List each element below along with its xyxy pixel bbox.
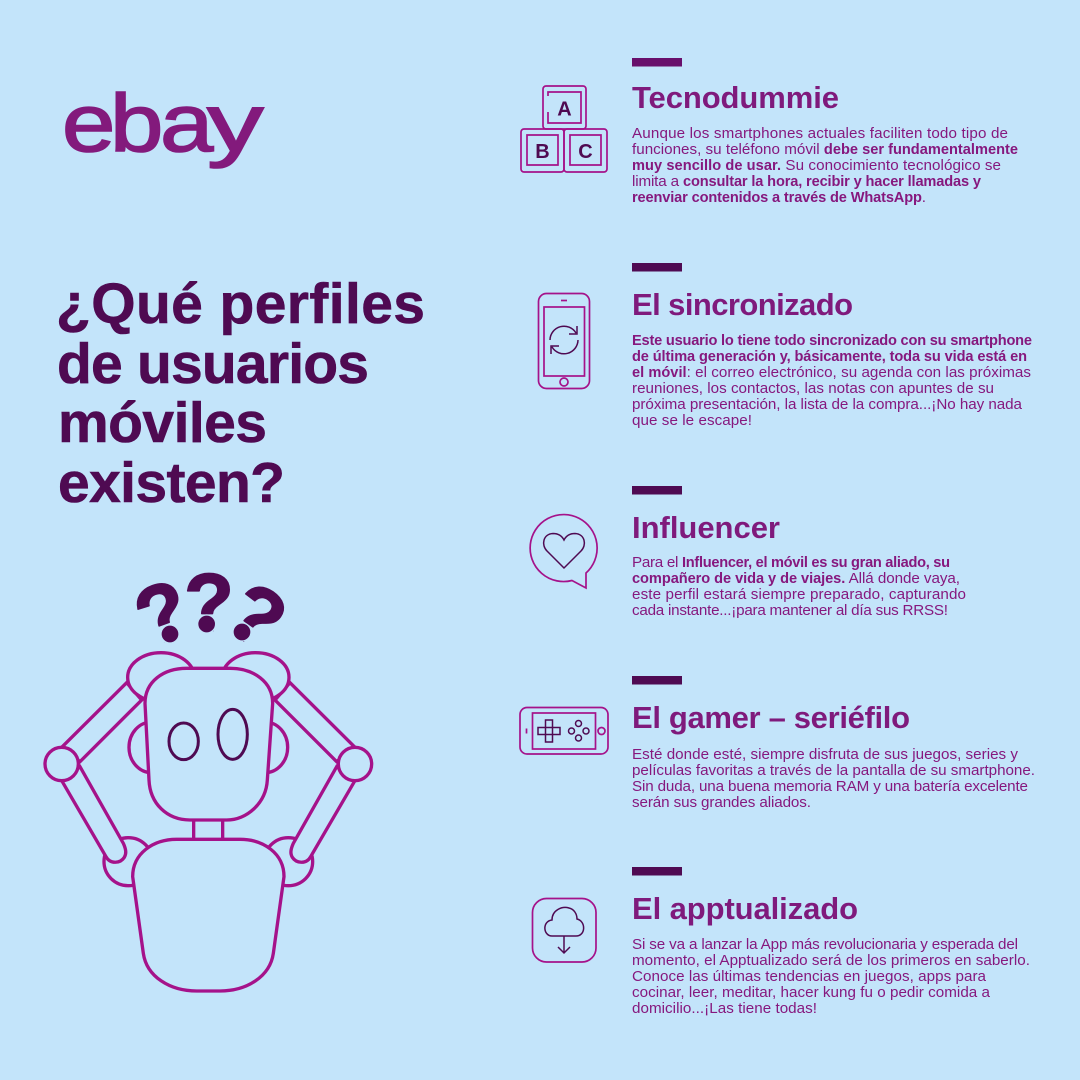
body text: funciones, su teléfono móvil debe ser fundamentalmente	[632, 141, 1018, 158]
title: de usuarios	[57, 332, 369, 396]
icon: ABC blocks: C	[578, 141, 593, 163]
body text: limita a consultar la hora, recibir y hacer llamadas y	[632, 173, 982, 190]
robot eyes	[169, 709, 247, 760]
accent bar	[632, 58, 682, 66]
heading: Tecnodummie	[632, 80, 839, 115]
title: ¿Qué perfiles	[56, 272, 425, 336]
body text: Para el Influencer, el móvil es su gran aliado, su	[632, 554, 950, 571]
accent bar	[632, 263, 682, 272]
body text: películas favoritas a través de la pantalla de su smartphone.	[632, 762, 1035, 779]
title: existen?	[58, 451, 285, 515]
body text: cada instante...¡para mantener al día sus RRSS!	[632, 602, 948, 619]
title	[56, 272, 425, 515]
body text: cocinar, leer, meditar, hacer kung fu o pedir comida a	[632, 984, 991, 1001]
body text: muy sencillo de usar. Su conocimiento tecnológico se	[632, 157, 1001, 174]
body text: reenviar contenidos a través de WhatsApp.	[632, 189, 926, 206]
logo: ebay	[62, 77, 264, 168]
body text	[632, 936, 1030, 1017]
illustration: confused robot	[45, 557, 372, 991]
body text: domicilio...¡Las tiene todas!	[632, 1000, 817, 1017]
body text: Esté donde esté, siempre disfruta de sus juegos, series y	[632, 746, 1018, 763]
body text: Conoce las últimas tendencias en juegos, apps para	[632, 968, 987, 985]
body text: Si se va a lanzar la App más revolucionaria y esperada del	[632, 936, 1018, 953]
body text: Sin duda, una buena memoria RAM y una batería excelente	[632, 778, 1028, 795]
robot arms and shoulders	[45, 653, 372, 886]
body text: que se le escape!	[632, 412, 752, 429]
icon: ABC blocks: B	[535, 141, 550, 163]
body text: momento, el Apptualizado será de los primeros en saberlo.	[632, 952, 1030, 969]
icon: phone with sync	[538, 294, 590, 388]
heading: Influencer	[632, 510, 780, 545]
panel: El sincronizado	[538, 263, 1032, 429]
heading: El gamer – seriéfilo	[632, 700, 910, 735]
panel: Influencer	[530, 486, 966, 619]
heading: El apptualizado	[632, 891, 858, 926]
body text: serán sus grandes aliados.	[632, 794, 811, 811]
body text: este perfil estará siempre preparado, capturando	[632, 586, 966, 603]
body text: el móvil: el correo electrónico, su agenda con las próximas	[632, 364, 1031, 381]
panel: El gamer – seriéfilo	[520, 676, 1035, 811]
accent bar	[632, 867, 682, 876]
icon: ABC blocks: A	[557, 98, 572, 120]
logo: ebay: y	[207, 77, 264, 168]
body text	[632, 125, 1018, 206]
question marks: ?	[123, 562, 201, 665]
icon: ABC blocks	[521, 86, 607, 172]
panel: El apptualizado	[532, 867, 1030, 1017]
body text: reuniones, los contactos, las notas con apuntes de su	[632, 380, 994, 397]
accent bar	[632, 486, 682, 494]
body text: próxima presentación, la lista de la compra...¡No hay nada	[632, 396, 1023, 413]
body text	[632, 333, 1032, 429]
logo: ebay: b	[110, 77, 163, 168]
logo: ebay: e	[62, 77, 115, 168]
question marks: ?	[184, 557, 234, 648]
heading: El sincronizado	[632, 287, 853, 322]
body text: compañero de vida y de viajes. Allá donde vaya,	[632, 570, 960, 587]
body text	[632, 746, 1035, 811]
title: móviles	[58, 391, 267, 455]
icon: speech bubble with heart	[530, 515, 597, 588]
question marks: ?	[210, 565, 303, 668]
body text: Este usuario lo tiene todo sincronizado con su smartphone	[632, 333, 1032, 349]
robot body	[133, 839, 284, 991]
question marks	[123, 557, 303, 668]
icon: cloud download	[532, 898, 596, 962]
body text	[632, 554, 966, 619]
robot head	[145, 668, 273, 820]
body text: Aunque los smartphones actuales faciliten todo tipo de	[632, 125, 1008, 142]
logo: ebay: a	[160, 77, 214, 168]
icon: game console phone	[520, 708, 608, 754]
panel: Tecnodummie	[521, 58, 1018, 206]
accent bar	[632, 676, 682, 684]
body text: de última generación y, básicamente, toda su vida está en	[632, 349, 1027, 365]
